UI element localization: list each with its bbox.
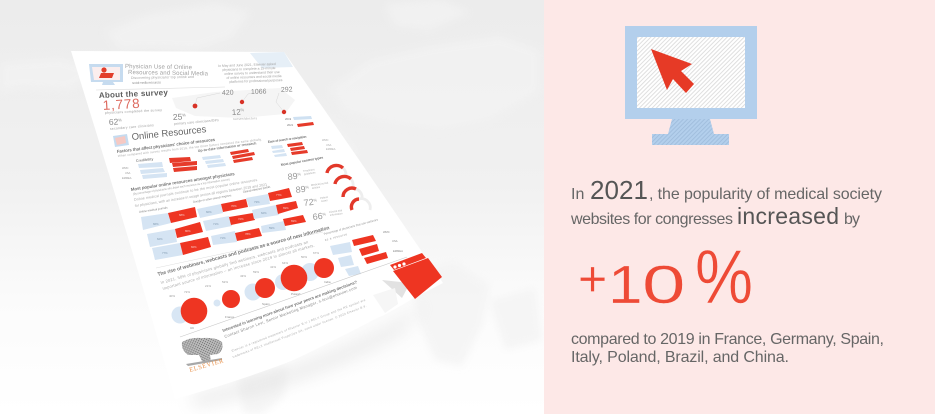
statement text: 2021 xyxy=(590,175,648,205)
tile chart: online medical journals xyxy=(139,205,211,260)
online resources subsection heading: for physicians, with an increase in usage across all regions between 2019 and 2021 xyxy=(135,183,267,208)
bubble chart: webinars by country: 41% xyxy=(270,265,276,269)
online resources subsection heading: (By percentage of physicians who listed each resource as a top information source) xyxy=(133,177,230,196)
tile chart: google or other search engines: 60% xyxy=(206,210,212,214)
about the survey section: 292 xyxy=(281,86,293,94)
bubble chart: webinars by country: 21% xyxy=(205,284,211,288)
about the survey section: About the survey xyxy=(99,88,169,100)
big stat: +10%: 0 xyxy=(642,255,686,315)
bubble chart: webinars by country: 40% xyxy=(169,294,175,298)
bar group: ease of search: WMC xyxy=(322,138,329,142)
tile chart: clinical reference portals: 69% xyxy=(291,219,297,223)
tile chart: google or other search engines: 72% xyxy=(238,217,244,221)
footnote text: Italy, Poland, Brazil, and China. xyxy=(571,349,789,366)
content types: stats and arcs: 89 xyxy=(287,171,298,182)
sheet intro paragraph: physicians to complete a 15-minute xyxy=(222,66,276,72)
big stat: +10%: 1 xyxy=(608,255,643,315)
online resources subsection heading: Most popular online resources amongst physicians xyxy=(130,171,235,192)
bubble chart: webinars by country: 59% xyxy=(253,270,259,274)
webinars by region bar group: Percentage of physicians that use webinars xyxy=(323,217,379,236)
about the survey section: 25 xyxy=(173,112,183,122)
bubble chart: webinars by country: Spain xyxy=(262,302,270,306)
content types: stats and arcs: % xyxy=(297,171,302,177)
webinars by region bar group: WMC xyxy=(383,230,390,234)
bar group: up-to-date information xyxy=(198,141,257,168)
tile chart: clinical reference portals: 77% xyxy=(276,193,282,197)
call to action: Contact Sharon Levi, Senior Marketing Manager, s.levi@elsevier.com xyxy=(224,285,358,339)
tile chart: online medical journals: 80% xyxy=(185,229,191,233)
legal text: trademarks of RELX Intellectual Properties SA, used under license. © 2022 Elsevier B.V. xyxy=(232,304,367,359)
about the survey section: 62 xyxy=(109,117,119,127)
tile chart: clinical reference portals: 69% xyxy=(283,206,289,210)
about the survey section: % xyxy=(240,107,245,112)
content types: stats and arcs: information xyxy=(330,211,343,217)
panel: tilted infographic sheet xyxy=(71,51,443,399)
content types: stats and arcs: % xyxy=(322,211,327,217)
Elsevier logo: ELSEVIER xyxy=(189,357,225,374)
online resources subsection heading: Online medical journals continue to be the most popular online resources xyxy=(134,178,258,202)
bubble chart: webinars by country: France xyxy=(225,315,235,319)
content types: stats and arcs: Patient xyxy=(320,195,328,200)
about the survey section: 12 xyxy=(232,107,241,117)
bubble chart: webinars by country: 50% xyxy=(301,255,307,259)
sheet intro paragraph: of online resources and social media xyxy=(226,74,282,80)
tile chart: clinical reference portals: 73% xyxy=(254,200,260,204)
rise of webinars heading and text: In 2021, 58% of physicians globally find webinars, webcasts and podcasts an xyxy=(160,239,309,285)
panel: pink stat panel xyxy=(544,0,935,414)
online resources heading xyxy=(113,124,207,147)
tile chart: online medical journals: 62% xyxy=(157,237,163,241)
bubble chart: webinars by country: Poland xyxy=(291,292,301,296)
sheet header icon: monitor xyxy=(89,64,123,85)
tile chart: clinical reference portals xyxy=(242,185,306,233)
big stat: +10%: + xyxy=(578,251,607,307)
content types: stats and arcs: cases xyxy=(321,199,329,203)
about the survey section: nurses/doctors xyxy=(233,116,258,121)
bubble chart: webinars by country: 52% xyxy=(222,280,228,284)
bar group: credibility: WMC xyxy=(122,166,129,170)
about the survey section xyxy=(99,86,314,131)
content types: stats and arcs: articles xyxy=(312,185,321,190)
content types: heading: Most popular content types xyxy=(280,156,324,167)
bar group: ease of search: USA xyxy=(326,143,332,147)
bubble chart: webinars by country: 72% xyxy=(184,290,190,294)
content types: stats and arcs: % xyxy=(313,197,318,203)
sheet intro paragraph: online survey to understand their use xyxy=(224,70,280,76)
webinars by region bar group: as a resource xyxy=(324,232,348,242)
tile chart: online medical journals: Online medical journals xyxy=(139,205,168,214)
tile chart: google or other search engines xyxy=(192,193,262,245)
about the survey section: secondary care clinicians xyxy=(110,123,154,131)
statement text: by xyxy=(844,211,860,228)
bar group: ease of search: EMMEA xyxy=(326,147,336,151)
sheet title: Physician Use of Online xyxy=(125,64,193,71)
bubble chart: webinars by country: India xyxy=(324,280,331,284)
bar group: up-to-date information: Up-to-date information or research xyxy=(198,141,257,153)
about the survey section: 1,778 xyxy=(102,96,140,113)
panel: map background xyxy=(0,0,545,414)
about the survey section: % xyxy=(118,117,122,123)
factors section heading: Factors that affect physicians' choice of resources xyxy=(117,137,216,154)
online resources heading: Online Resources xyxy=(131,124,207,143)
tile chart: clinical reference portals: 59% xyxy=(269,226,275,230)
sheet intro paragraph: platforms for professional purposes xyxy=(229,78,283,84)
rise of webinars heading and text: The rise of webinars, webcasts and podcasts as a source of new information xyxy=(157,225,330,278)
statement text: , the popularity of medical society xyxy=(649,186,882,203)
tile chart: google or other search engines: 78% xyxy=(245,232,251,236)
big stat: +10% xyxy=(578,235,753,320)
online resources subsection heading xyxy=(130,171,267,208)
tile chart: online medical journals: 82% xyxy=(191,245,197,249)
tile chart: google or other search engines: 71% xyxy=(213,222,219,226)
bubble chart: webinars by country: 43% xyxy=(240,274,246,278)
sheet intro paragraph: In May and June 2021, Elsevier asked xyxy=(218,62,276,68)
webinars by region bar group xyxy=(323,217,403,276)
statement text: In xyxy=(571,186,584,203)
content types: stats and arcs: Clinical trial xyxy=(329,208,343,214)
icon: monitor with cursor xyxy=(625,26,757,145)
folded red corner xyxy=(373,253,442,313)
footnote text xyxy=(571,331,884,366)
Elsevier logo xyxy=(182,338,225,374)
content types: stats and arcs: Medical journal xyxy=(311,181,329,187)
tile chart: clinical reference portals: 62% xyxy=(261,211,267,215)
content types: stats and arcs xyxy=(287,165,370,222)
big stat: +10%: % xyxy=(695,235,753,320)
tile chart: online medical journals: 68% xyxy=(179,213,185,217)
bar group: credibility xyxy=(122,157,197,180)
about the survey section: 1066 xyxy=(251,88,267,96)
tile chart: clinical reference portals: Clinical reference portals xyxy=(242,185,271,194)
content types: stats and arcs: guidelines xyxy=(304,170,316,176)
bubble chart: webinars by country: UK xyxy=(190,326,194,330)
tile chart: online medical journals: 66% xyxy=(153,222,159,226)
about the survey section: 2021 xyxy=(287,123,294,127)
tile chart: online medical journals: 77% xyxy=(162,251,168,255)
tile chart: google or other search engines: 70% xyxy=(231,204,237,208)
sheet title: Resources and Social Media xyxy=(128,70,209,77)
webinars by region bar group: EMMEA xyxy=(393,249,403,253)
content types: stats and arcs: 66 xyxy=(312,211,323,222)
statement text xyxy=(570,175,882,229)
webinars by region bar group: USA xyxy=(392,239,398,243)
rise of webinars heading and text: important source of information – an increase since 2019 in almost all markets. xyxy=(162,243,315,291)
content types: stats and arcs: % xyxy=(305,184,310,190)
bar group: ease of search: Ease of search or navigation xyxy=(268,135,307,144)
factors section heading: When compared with survey results from 2019, the top three factors remained the same globally. xyxy=(118,137,262,158)
sheet title: Discovering physicians' top online and xyxy=(131,75,194,80)
about the survey section: 420 xyxy=(222,90,234,97)
sheet title xyxy=(125,64,209,85)
bubble chart: webinars by country: 64% xyxy=(282,261,288,265)
about the survey section: 2019 xyxy=(285,117,292,121)
bar group: credibility: USA xyxy=(125,171,131,175)
footnote text: compared to 2019 in France, Germany, Spain, xyxy=(571,331,884,348)
bubble chart: webinars by country: 67% xyxy=(313,251,319,255)
tile chart: google or other search engines: Google or other search engines xyxy=(192,193,232,204)
about the survey section: % xyxy=(182,112,186,118)
sheet intro paragraph xyxy=(218,62,283,84)
sheet title: social media resources xyxy=(132,80,161,85)
statement text: websites for congresses xyxy=(570,211,733,228)
paper shadow xyxy=(190,302,425,408)
bar group: credibility: Credibility xyxy=(136,157,154,163)
call to action: Interested in learning more about how your peers are making decisions? xyxy=(222,279,358,333)
statement text: increased xyxy=(737,203,839,229)
content types: stats and arcs: 89 xyxy=(295,184,306,195)
tile chart: google or other search engines: 71% xyxy=(220,236,226,240)
about the survey section: primary care clinicians/GPs xyxy=(174,118,219,126)
bar group: credibility: EMMEA xyxy=(122,176,132,180)
content types: stats and arcs: Treatment xyxy=(303,167,315,173)
bubble chart: webinars by country xyxy=(169,251,334,330)
legal text: Elsevier is a registered trademark of Elsevier B.V. | RELX Group and the RE symbol are xyxy=(231,298,366,353)
content types: stats and arcs: 72 xyxy=(303,197,314,208)
bar group: ease of search xyxy=(268,135,336,157)
about the survey section: physicians completed the survey xyxy=(105,108,162,115)
